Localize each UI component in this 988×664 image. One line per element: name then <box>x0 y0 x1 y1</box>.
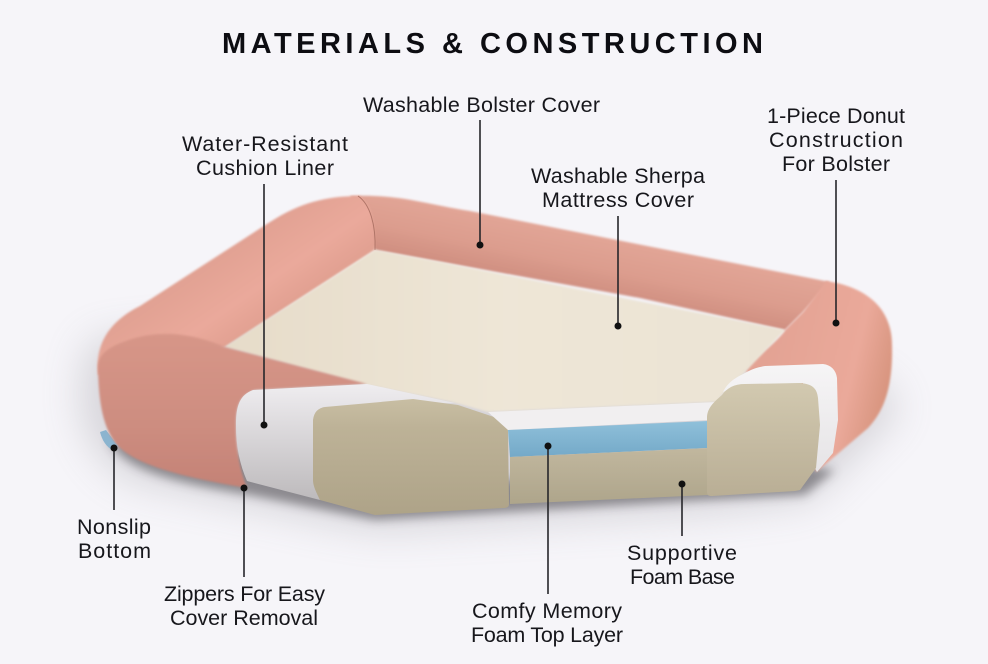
label: Washable Sherpa Mattress Cover <box>531 164 705 330</box>
label: Comfy Memory Foam Top Layer <box>471 442 623 647</box>
bolster: right corner <box>745 281 892 472</box>
label: Supportive Foam Base <box>627 480 737 589</box>
label: Washable Bolster Cover: Washable Bolster Cover <box>363 93 600 117</box>
bolster: back section <box>350 196 830 330</box>
label: 1-Piece Donut Construction For Bolster <box>767 104 905 326</box>
nonslip bottom strip <box>100 430 118 451</box>
bolster seam <box>358 196 375 250</box>
water-resistant liner left <box>236 384 455 500</box>
label: Supportive Foam Base: Foam Base <box>630 565 735 589</box>
illustration: cutaway pet bed <box>81 196 900 530</box>
label: Water-Resistant Cushion Liner: Cushion Liner <box>196 156 334 180</box>
label: 1-Piece Donut Construction For Bolster: Construction <box>769 128 903 152</box>
memory foam blue layer <box>508 421 708 457</box>
label: Zippers For Easy Cover Removal: Cover Removal <box>170 606 318 630</box>
label: Nonslip Bottom: Bottom <box>78 539 151 563</box>
label: Water-Resistant Cushion Liner <box>182 132 348 428</box>
label: Supportive Foam Base: Supportive <box>627 541 737 565</box>
right liner <box>723 364 838 472</box>
supportive foam base <box>510 448 708 504</box>
label: Zippers For Easy Cover Removal: Zippers For Easy <box>164 582 325 606</box>
floor shadow <box>81 300 900 530</box>
label: 1-Piece Donut Construction For Bolster: 1-Piece Donut <box>767 104 905 128</box>
title: MATERIALS & CONSTRUCTION <box>222 28 763 60</box>
label: Nonslip Bottom: Nonslip <box>77 515 151 539</box>
label: Washable Bolster Cover <box>363 93 600 248</box>
label: 1-Piece Donut Construction For Bolster: For Bolster <box>782 152 890 176</box>
bolster: left section <box>98 196 375 375</box>
label: Washable Sherpa Mattress Cover: Mattress Cover <box>542 188 694 212</box>
label: Water-Resistant Cushion Liner: Water-Resistant <box>182 132 348 156</box>
bolster foam left <box>313 399 509 515</box>
bolster: front left section <box>98 334 367 488</box>
white mattress cover cut <box>488 402 717 430</box>
mattress top <box>225 250 785 412</box>
right foam <box>707 383 820 496</box>
label: Comfy Memory Foam Top Layer: Comfy Memory <box>472 599 622 623</box>
label: Comfy Memory Foam Top Layer: Foam Top Layer <box>471 623 623 647</box>
label: Nonslip Bottom <box>77 444 151 563</box>
label: Washable Sherpa Mattress Cover: Washable Sherpa <box>531 164 705 188</box>
label: Zippers For Easy Cover Removal <box>164 484 325 630</box>
